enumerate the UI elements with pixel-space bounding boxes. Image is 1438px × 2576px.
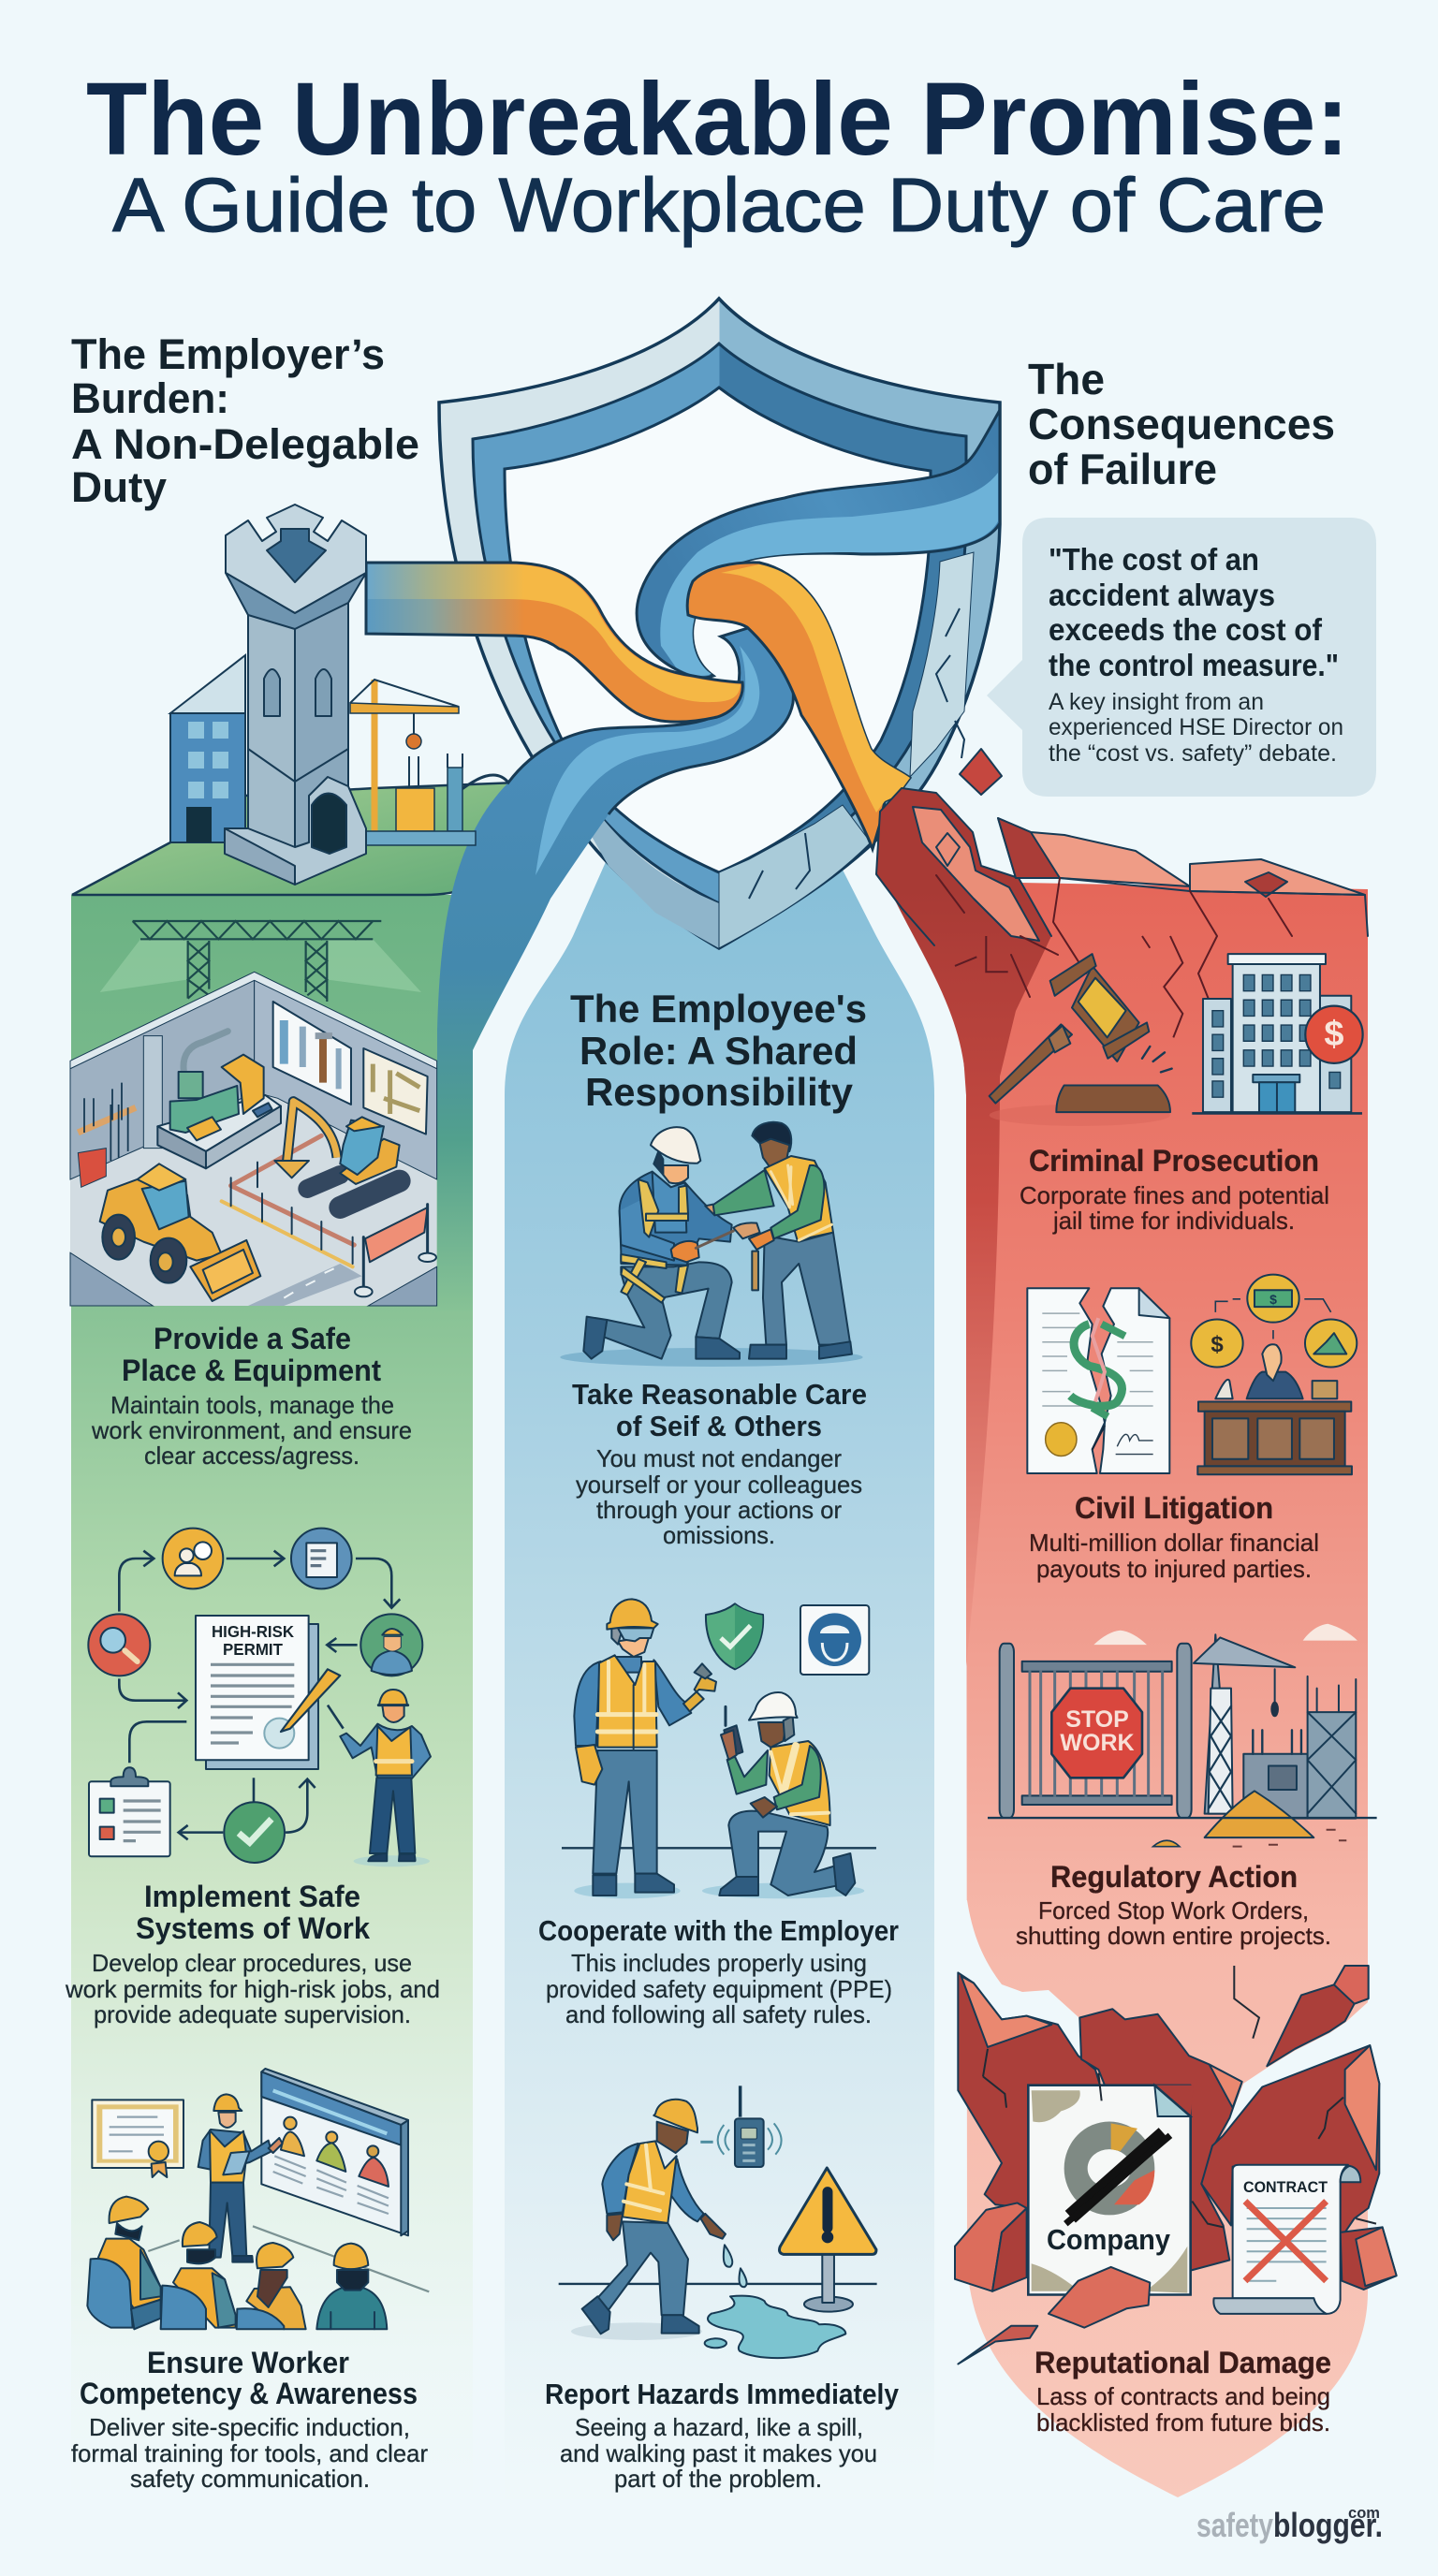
- text: criminal prosecution: Criminal Prosecution: [1029, 1144, 1319, 1178]
- callout: quote: A key insight from an: [1049, 689, 1264, 715]
- text: report hazards: [545, 2378, 900, 2493]
- text: criminal prosecution: [1020, 1144, 1329, 1235]
- text: provide a safe place: work environment, and ensure: [91, 1416, 412, 1444]
- logo: safetyblogger: safety: [1196, 2506, 1273, 2544]
- text: regulatory action: [1016, 1860, 1331, 1950]
- illustration: stop work gate and site: [988, 1624, 1377, 1847]
- text: criminal prosecution: jail time for individuals.: [1052, 1207, 1295, 1235]
- illustration: stop work gate and site: WORK: [1060, 1730, 1135, 1756]
- panel: employer column: [71, 895, 473, 2490]
- text: reasonable care: yourself or your colleagues: [576, 1471, 862, 1499]
- heading: consequences: The: [1028, 355, 1105, 403]
- text: provide a safe place: [91, 1322, 412, 1470]
- title: A Guide to Workplace Duty of Care: [112, 163, 1326, 248]
- text: regulatory action: Forced Stop Work Orders,: [1038, 1896, 1309, 1925]
- heading: employee role: The Employee's: [570, 987, 867, 1031]
- illustration: workers checking harness: [560, 1122, 863, 1367]
- illustration: cooperating workers with PPE: [562, 1599, 876, 1898]
- heading: employer: A Non-Delegable: [71, 420, 419, 468]
- text: safe systems of work: work permits for high-risk jobs, and: [65, 1975, 440, 2003]
- panel: employee column: [473, 824, 966, 2509]
- callout: quote: the control measure.": [1049, 648, 1339, 682]
- illustration: gavel and company building: [955, 936, 1363, 1126]
- logo: safetyblogger: blogger.: [1273, 2506, 1383, 2544]
- icon: shield: [439, 299, 1000, 948]
- text: reputational damage: Lass of contracts and being: [1036, 2382, 1330, 2410]
- text: safe systems of work: Implement Safe: [144, 1880, 360, 1913]
- panel: consequences column: [871, 880, 1368, 2497]
- callout: quote: [987, 518, 1376, 797]
- illustration: crumbling reputation: [955, 1900, 1397, 2364]
- text: worker competency: safety communication.: [130, 2465, 370, 2493]
- illustration: permit flow: [88, 1529, 431, 1866]
- excavator: [274, 1102, 400, 1208]
- heading: employee role: Responsibility: [585, 1070, 854, 1114]
- heading: consequences: [1028, 355, 1335, 493]
- text: provide a safe place: clear access/agress.: [144, 1442, 360, 1470]
- text: worker competency: Deliver site-specific induction,: [89, 2413, 410, 2441]
- text: reputational damage: Reputational Damage: [1034, 2346, 1331, 2379]
- heading: consequences: Consequences: [1028, 400, 1335, 448]
- text: safe systems of work: Develop clear procedures, use: [92, 1949, 412, 1977]
- label: high-risk permit: HIGH-RISK: [212, 1622, 294, 1641]
- heading: employer: Burden:: [71, 374, 229, 422]
- text: reputational damage: [1034, 2346, 1331, 2437]
- text: reasonable care: Take Reasonable Care: [572, 1378, 867, 1411]
- text: worker competency: [71, 2346, 428, 2493]
- text: provide a safe place: Provide a Safe: [154, 1322, 351, 1355]
- callout: quote: the “cost vs. safety” debate.: [1049, 740, 1337, 767]
- label: high-risk permit: PERMIT: [223, 1640, 283, 1659]
- text: regulatory action: Regulatory Action: [1050, 1860, 1298, 1894]
- illustration: stop work gate and site: STOP: [1065, 1706, 1129, 1733]
- text: criminal prosecution: Corporate fines and potential: [1020, 1181, 1329, 1209]
- callout: quote: exceeds the cost of: [1049, 612, 1323, 647]
- arrow: lower blue ribbon: [437, 627, 793, 1310]
- text: safe systems of work: [65, 1880, 440, 2028]
- title: The Unbreakable Promise:: [86, 62, 1349, 177]
- illustration: hazard reporting: [559, 2086, 877, 2358]
- callout: quote: accident always: [1049, 578, 1275, 612]
- illustration: torn document and payouts: [1027, 1275, 1357, 1474]
- illustration: safe workplace: [70, 921, 437, 1306]
- text: provide a safe place: Place & Equipment: [122, 1354, 381, 1387]
- text: cooperate: Cooperate with the Employer: [538, 1914, 899, 1947]
- illustration: torn document and payouts: $: [1269, 1292, 1277, 1307]
- arrow: upper blue ribbon: [637, 410, 1000, 678]
- icon: building behind tower: [170, 655, 245, 842]
- text: reasonable care: through your actions or: [596, 1496, 842, 1524]
- ground platform: [72, 783, 517, 895]
- logo: safetyblogger: [1196, 2504, 1383, 2544]
- text: reasonable care: of Seif & Others: [616, 1410, 822, 1442]
- text: cooperate: and following all safety rules.: [565, 2000, 872, 2028]
- heading: employee role: [570, 987, 867, 1114]
- illustration: gavel and company building: $: [1324, 1015, 1344, 1054]
- text: reasonable care: omissions.: [663, 1521, 775, 1549]
- callout: quote: experienced HSE Director on: [1049, 714, 1343, 740]
- text: worker competency: Ensure Worker: [147, 2346, 349, 2379]
- text: worker competency: Competency & Awareness: [80, 2377, 418, 2410]
- text: worker competency: formal training for tools, and clear: [71, 2439, 428, 2467]
- consequences column dark edge: [880, 889, 1000, 1666]
- text: civil litigation: Civil Litigation: [1075, 1491, 1273, 1525]
- text: cooperate: [538, 1914, 899, 2028]
- logo: safetyblogger: com: [1348, 2504, 1380, 2522]
- title: [86, 62, 1349, 248]
- text: civil litigation: Multi-million dollar financial: [1029, 1529, 1319, 1557]
- icon: rock cliff top: [876, 749, 1368, 1095]
- heading: employer: Duty: [71, 463, 167, 511]
- text: safe systems of work: provide adequate supervision.: [94, 2000, 411, 2028]
- text: regulatory action: shutting down entire projects.: [1016, 1922, 1331, 1950]
- text: cooperate: provided safety equipment (PPE): [546, 1975, 892, 2003]
- heading: employee role: Role: A Shared: [580, 1029, 858, 1073]
- text: civil litigation: [1029, 1491, 1319, 1583]
- text: report hazards: and walking past it makes you: [560, 2439, 877, 2467]
- illustration: crumbling reputation: CONTRACT: [1243, 2178, 1328, 2196]
- illustration: torn document and payouts: $: [1211, 1332, 1224, 1357]
- icon: tower: [225, 505, 366, 885]
- illustration: crumbling reputation: Company: [1047, 2223, 1171, 2256]
- text: report hazards: part of the problem.: [614, 2465, 822, 2493]
- heading: employer: The Employer’s: [71, 330, 385, 378]
- heading: consequences: of Failure: [1028, 445, 1217, 493]
- text: report hazards: Seeing a hazard, like a spill,: [575, 2413, 863, 2441]
- text: cooperate: This includes properly using: [571, 1949, 867, 1977]
- arrow: orange ribbon to rock: [687, 563, 910, 849]
- text: report hazards: Report Hazards Immediately: [545, 2378, 900, 2410]
- text: reasonable care: You must not endanger: [596, 1444, 842, 1472]
- icon: crane and plant: [350, 680, 476, 845]
- callout: quote: "The cost of an: [1049, 542, 1259, 577]
- heading: employer: [71, 330, 419, 511]
- illustration: training session: [87, 2069, 429, 2329]
- label: high-risk permit: [212, 1622, 294, 1659]
- text: reasonable care: [572, 1378, 867, 1549]
- text: civil litigation: payouts to injured parties.: [1036, 1555, 1312, 1583]
- text: provide a safe place: Maintain tools, manage the: [110, 1391, 394, 1419]
- arrow: orange ribbon from tower: [366, 563, 742, 722]
- text: safe systems of work: Systems of Work: [136, 1911, 370, 1945]
- text: reputational damage: blacklisted from future bids.: [1036, 2408, 1330, 2437]
